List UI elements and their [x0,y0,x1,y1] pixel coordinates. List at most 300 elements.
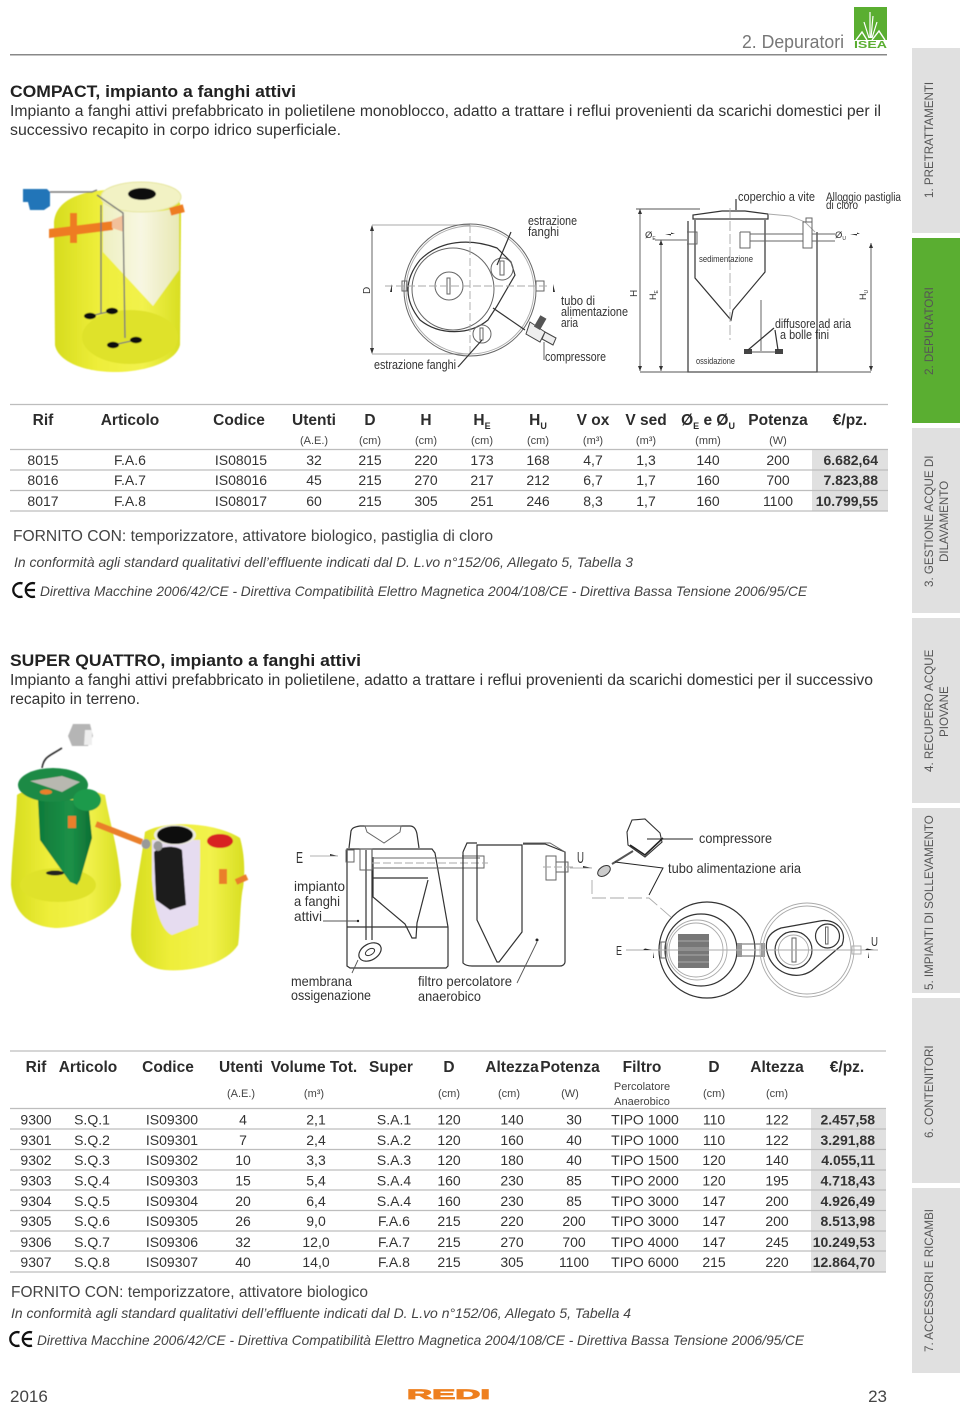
row 9305: 147 [702,1213,726,1229]
row 9305: S.Q.6 [74,1213,110,1229]
tab 3 [912,428,960,613]
row 8015: 220 [414,452,438,468]
table header: (A.E.) [227,1088,255,1100]
drawing: COMPACT section view [629,190,902,372]
row 9306: 700 [562,1234,586,1250]
row 9302: 180 [500,1152,524,1168]
row 9300: 140 [500,1112,524,1128]
CE directives: Direttiva Macchine 2006/42/CE - Direttiva Compatibilità Elettro Magnetica 2004/108/CE - Direttiva Bassa Tensione 2006/95/CE [37,1332,805,1348]
row 9302: 9302 [20,1152,52,1168]
intro text: COMPACT: successivo recapito in corpo idrico superficiale. [10,122,341,139]
row 9304: 160 [437,1193,461,1209]
row 8017: IS08017 [215,493,267,509]
table header: (cm) [359,435,381,447]
row 9305: IS09305 [146,1213,198,1229]
table header: H [473,412,485,429]
heading: COMPACT: COMPACT, impianto a fanghi attivi [10,82,296,101]
row 9307: 220 [765,1254,789,1270]
footer year: 2016 [10,1387,48,1406]
table header: Super [369,1059,413,1076]
row 8015: 32 [306,452,322,468]
label: dimension symbols: H [629,290,640,297]
label: dimension symbols: Ø [835,230,842,241]
row 9300: 4 [239,1112,247,1128]
row 8015 [27,452,878,468]
row 9307 [20,1254,875,1270]
row 8016 [27,472,878,488]
row 9301: 3.291,88 [820,1132,875,1148]
row 9303: 4.718,43 [820,1172,875,1188]
row 9301: 110 [703,1132,725,1148]
row 9302: 40 [566,1152,582,1168]
row 9305: 9,0 [306,1213,326,1229]
row 9306: 270 [500,1234,524,1250]
right tank [131,824,247,970]
row 9304 [20,1193,875,1209]
row 9304: 6,4 [306,1193,326,1209]
row 9303: 120 [702,1172,726,1188]
row 8015: 168 [526,452,550,468]
label: diffusore [775,317,851,342]
row 9305: 8.513,98 [820,1213,875,1229]
row 8017: 305 [414,493,438,509]
label: tubo alimentazione aria: tubo alimentazione aria [668,860,801,876]
table header [26,1059,864,1108]
row 9301: 7 [239,1132,247,1148]
label: diffusore: a bolle fini [780,328,829,342]
table header: (m³) [636,435,656,447]
table header: (A.E.) [300,435,328,447]
row 9300: 110 [703,1112,725,1128]
label: tubo di alimentazione aria: aria [561,316,578,330]
row 9307: 215 [437,1254,461,1270]
row 8016: 1,7 [636,472,656,488]
tab 1 [912,48,960,233]
tab 4: PIOVANE [938,686,951,737]
row 9307: IS09307 [146,1254,198,1270]
row 9305: 200 [562,1213,586,1229]
row 9304: TIPO 3000 [611,1193,679,1209]
label: tubo di alimentazione aria: alimentazione [561,305,628,319]
tab 7 [912,1188,960,1373]
row 8016: 6,7 [583,472,603,488]
label: membrana ossigenazione: membrana [291,973,352,989]
label: dimension symbols: U [842,236,846,242]
row 9300 [20,1112,875,1128]
row 9307: 305 [500,1254,524,1270]
row 9305: 220 [500,1213,524,1229]
row 9303: 230 [500,1172,524,1188]
conformity note: In conformità agli standard qualitativi dell’effluente indicati dal D. L.vo n°152/06, Allegato 5, Tabella 4 [11,1305,631,1321]
tab 5: 5. IMPIANTI DI SOLLEVAMENTO [923,815,936,990]
label: U: U [577,850,584,867]
tab 2 active [912,238,960,423]
row 8015: 6.682,64 [824,452,878,468]
row 9304: 4.926,49 [820,1193,875,1209]
row 9302 [20,1152,875,1168]
compressor [596,819,663,879]
row 9306: TIPO 4000 [611,1234,679,1250]
row 8017: 160 [696,493,720,509]
tab 6: 6. CONTENITORI [923,1045,936,1138]
row 9306: 147 [702,1234,726,1250]
table header: V ox [577,412,610,429]
illustration: COMPACT tank 3D [23,182,185,372]
intro text: SUPER QUATTRO [10,672,873,708]
row 9304: 85 [566,1193,582,1209]
row 9305: 200 [765,1213,789,1229]
table header: (cm) [471,435,493,447]
row 9303: 160 [437,1172,461,1188]
table header: Ø [681,412,693,429]
row 9307: TIPO 6000 [611,1254,679,1270]
label: filtro percolatore anaerobico: anaerobico [418,988,481,1004]
drawing: SUPER QUATTRO plan view and compressor [592,819,878,998]
row 9303: 9303 [20,1172,52,1188]
table: COMPACT [10,404,888,511]
table header: (cm) [703,1088,725,1100]
table header: e Ø [699,412,728,429]
page header [10,7,887,56]
row 9307: 14,0 [302,1254,330,1270]
row 9300: 9300 [20,1112,52,1128]
row 8016: 215 [358,472,382,488]
table header [33,412,867,447]
label: dimension symbols: H [648,294,658,300]
row 9302: TIPO 1500 [611,1152,679,1168]
row 9306: S.Q.7 [74,1234,110,1250]
label: dimension symbols [629,230,870,300]
label: diffusore: diffusore ad aria [775,317,851,331]
page number: 23 [868,1387,887,1406]
row 9301: 120 [437,1132,461,1148]
row 9304: 230 [500,1193,524,1209]
table header: Altezza [750,1059,804,1076]
label: dimension symbols: U [864,290,870,294]
label: E: E [616,943,622,958]
table header: U [540,421,547,431]
label: dimension symbols: H [858,294,868,300]
intro text: SUPER QUATTRO: Impianto a fanghi attivi prefabbricato in polietilene, adatto a trattare i reflui provenienti da scarichi domestici per il successivo [10,672,873,689]
heading: SUPER QUATTRO: SUPER QUATTRO, impianto a fanghi attivi [10,651,361,670]
row 8016: 8016 [27,472,59,488]
table header: E [693,421,699,431]
row 9304: 20 [235,1193,251,1209]
row 9301: 122 [765,1132,789,1148]
row 9306: 215 [437,1234,461,1250]
row 8017: 246 [526,493,550,509]
row 9301: IS09301 [146,1132,198,1148]
row 9303: 15 [235,1172,251,1188]
row 8016: 45 [306,472,322,488]
label: U: U [871,934,878,949]
row 9301: TIPO 1000 [611,1132,679,1148]
table header: D [364,412,376,429]
row 9300: 2,1 [306,1112,326,1128]
row 8017 [27,493,878,509]
row 9300: IS09300 [146,1112,198,1128]
row 9303: S.A.4 [377,1172,411,1188]
row 9301: S.Q.2 [74,1132,110,1148]
label: sedimentazione: sedimentazione [699,254,753,264]
row 8015: 140 [696,452,720,468]
table header: Codice [142,1059,194,1076]
row 9301: 9301 [20,1132,52,1148]
table header: €/pz. [833,412,867,429]
row 9301: 40 [566,1132,582,1148]
row 9302: 10 [235,1152,251,1168]
tab 3: DILAVAMENTO [938,481,951,562]
label: compressore: compressore [545,350,606,364]
row 8016: F.A.7 [114,472,146,488]
table header: (cm) [438,1088,460,1100]
row 8017: 1,7 [636,493,656,509]
label: ossidazione: ossidazione [696,356,735,366]
row 9300: S.A.1 [377,1112,411,1128]
row 9300: 122 [765,1112,789,1128]
row 9307: 215 [702,1254,726,1270]
label: tubo di alimentazione aria [561,294,628,330]
logo: ISEA: ISEA [854,40,887,51]
row 8016: 270 [414,472,438,488]
table header: Percolatore [614,1081,670,1093]
label: filtro percolatore anaerobico: filtro percolatore [418,973,512,989]
tab 3: 3. GESTIONE ACQUE DI [923,456,936,587]
table header: D [443,1059,455,1076]
row 9303 [20,1172,875,1188]
row 9300: 2.457,58 [820,1112,875,1128]
row 8015: 173 [470,452,494,468]
label: membrana ossigenazione: ossigenazione [291,987,371,1003]
sidebar navigation tabs [912,48,960,1373]
tab 4: 4. RECUPERO ACQUE [923,649,936,772]
row 8017: F.A.8 [114,493,146,509]
table header: Potenza [748,412,808,429]
label: estrazione fanghi top: fanghi [528,225,559,239]
table header: (cm) [527,435,549,447]
row 9302: S.Q.3 [74,1152,110,1168]
row 9300: 30 [566,1112,582,1128]
table header: (mm) [695,435,721,447]
label: impianto a fanghi attivi: attivi [294,908,322,924]
tab 6 [912,998,960,1183]
row 9304: 9304 [20,1193,52,1209]
label: estrazione fanghi top [528,214,577,239]
label: filtro percolatore anaerobico [418,973,512,1004]
illustration: SUPER QUATTRO tanks 3D [11,724,247,970]
left tank [11,724,121,928]
row 8017: 8,3 [583,493,603,509]
row 8017: 215 [358,493,382,509]
row 8015: 200 [766,452,790,468]
row 9302: 3,3 [306,1152,326,1168]
row 8016: 160 [696,472,720,488]
label: alloggio pastiglia: di cloro [826,200,858,212]
row 9307: 9307 [20,1254,52,1270]
label: alloggio pastiglia: Alloggio pastiglia [826,192,902,204]
row 9305 [20,1213,875,1229]
table header: (m³) [583,435,603,447]
tab 1: 1. PRETRATTAMENTI [923,82,936,198]
row 8016: IS08016 [215,472,267,488]
row 9303: TIPO 2000 [611,1172,679,1188]
supplied-with note: FORNITO CON: temporizzatore, attivatore biologico [11,1284,368,1301]
label: impianto a fanghi attivi: a fanghi [294,893,340,909]
row 9306: F.A.7 [378,1234,410,1250]
row 9305: 9305 [20,1213,52,1229]
row 8016: 7.823,88 [824,472,878,488]
table header: Codice [213,412,265,429]
tab 2 active: 2. DEPURATORI [923,287,936,375]
row 9306: 10.249,53 [813,1234,875,1250]
row 9307: F.A.8 [378,1254,410,1270]
label: membrana ossigenazione [291,973,371,1003]
drawing: SUPER QUATTRO section view [291,826,592,1004]
table header: Altezza [485,1059,539,1076]
label: dimension symbols: Ø [645,230,652,241]
row 8015: F.A.6 [114,452,146,468]
row 9303: S.Q.4 [74,1172,110,1188]
logo: REDI: REDI [407,1387,490,1402]
table header: Articolo [59,1059,117,1076]
row 8015: IS08015 [215,452,267,468]
drawing: COMPACT plan view: D [362,287,373,294]
conformity note: In conformità agli standard qualitativi dell’effluente indicati dal D. L.vo n°152/06, Allegato 5, Tabella 3 [14,554,633,570]
label: tubo di alimentazione aria: tubo di [561,294,595,308]
label: impianto a fanghi attivi [294,878,345,924]
table header: (m³) [304,1088,324,1100]
CE directives: Direttiva Macchine 2006/42/CE - Direttiva Compatibilità Elettro Magnetica 2004/108/CE - Direttiva Bassa Tensione 2006/95/CE [40,583,808,599]
table header: Rif [26,1059,47,1076]
table header: (W) [561,1088,579,1100]
row 9304: S.Q.5 [74,1193,110,1209]
row 8015: 8015 [27,452,59,468]
row 8015: 4,7 [583,452,603,468]
row 8017: 1100 [763,493,793,509]
logo: ISEA [854,7,887,51]
section title: 2. Depuratori: 2. Depuratori [742,32,844,52]
row 9302: S.A.3 [377,1152,411,1168]
row 8017: 251 [470,493,494,509]
row 9302: IS09302 [146,1152,198,1168]
row 9303: 195 [765,1172,789,1188]
table header: Filtro [623,1059,661,1076]
table header: (W) [769,435,787,447]
row 9306: 12,0 [302,1234,330,1250]
supplied-with note: FORNITO CON: temporizzatore, attivatore biologico, pastiglia di cloro [13,528,493,545]
row 9307: 1100 [559,1254,589,1270]
right plan circle [760,903,861,997]
row 8015: 215 [358,452,382,468]
left plan circle [659,902,765,998]
table header: H [420,412,432,429]
row 9302: 4.055,11 [821,1152,875,1168]
table header: Utenti [292,412,336,429]
row 9302: 140 [765,1152,789,1168]
row 9300: S.Q.1 [74,1112,110,1128]
row 9307: 12.864,70 [813,1254,875,1270]
label: E: E [296,850,303,867]
row 9305: F.A.6 [378,1213,410,1229]
table header: (cm) [415,435,437,447]
tab 4 [912,618,960,803]
table header: E [485,421,491,431]
label: compressore: compressore [699,830,772,846]
label: impianto a fanghi attivi: impianto [294,878,345,894]
row 8017: 10.799,55 [816,493,878,509]
drawing: COMPACT plan view [362,214,628,372]
row 9306: 245 [765,1234,789,1250]
intro text: COMPACT [10,103,881,139]
row 9305: TIPO 3000 [611,1213,679,1229]
row 9302: 120 [702,1152,726,1168]
row 9303: 85 [566,1172,582,1188]
label: alloggio pastiglia [826,192,902,212]
table header: Volume Tot. [271,1059,357,1076]
table header: (cm) [498,1088,520,1100]
row 9305: 215 [437,1213,461,1229]
tab 7: 7. ACCESSORI E RICAMBI [923,1209,936,1352]
label: estrazione fanghi top: estrazione [528,214,577,228]
intro text: SUPER QUATTRO: recapito in terreno. [10,691,140,708]
row 9307: S.Q.8 [74,1254,110,1270]
table header: Articolo [101,412,159,429]
row 9301 [20,1132,875,1148]
label: coperchio a vite: coperchio a vite [738,190,815,204]
row 9306 [20,1234,875,1250]
row 9302: 120 [437,1152,461,1168]
label: estrazione fanghi bottom: estrazione fanghi [374,358,456,372]
row 9301: 160 [500,1132,524,1148]
table header: Anaerobico [614,1096,670,1108]
row 9300: TIPO 1000 [611,1112,679,1128]
row 9306: 9306 [20,1234,52,1250]
table header: €/pz. [830,1059,864,1076]
row 8016: 212 [526,472,550,488]
row 8015: 1,3 [636,452,656,468]
row 9306: IS09306 [146,1234,198,1250]
row 9301: 2,4 [306,1132,326,1148]
row 9306: 32 [235,1234,251,1250]
label: dimension symbols: E [652,236,656,242]
table header: (cm) [766,1088,788,1100]
table header: Utenti [219,1059,263,1076]
row 9307: 40 [235,1254,251,1270]
table: SUPER QUATTRO [10,1051,886,1272]
tab 5 [912,808,960,993]
row 8017: 8017 [27,493,59,509]
row 9304: 147 [702,1193,726,1209]
intro text: COMPACT: Impianto a fanghi attivi prefabbricato in polietilene monoblocco, adatto a trattare i reflui provenienti da scarichi domestici per il [10,103,881,120]
table header: Potenza [540,1059,600,1076]
row 9300: 120 [437,1112,461,1128]
row 9301: S.A.2 [377,1132,411,1148]
row 9305: 26 [235,1213,251,1229]
table header: Rif [33,412,54,429]
table header: V sed [625,412,667,429]
table header: H [529,412,540,429]
row 8016: 217 [470,472,494,488]
row 9303: 5,4 [306,1172,326,1188]
table header: U [728,421,735,431]
row 9304: IS09304 [146,1193,198,1209]
label: dimension symbols: E [654,290,660,294]
row 8017: 60 [306,493,322,509]
row 8016: 700 [766,472,790,488]
row 9304: S.A.4 [377,1193,411,1209]
row 9304: 200 [765,1193,789,1209]
table header: D [708,1059,720,1076]
